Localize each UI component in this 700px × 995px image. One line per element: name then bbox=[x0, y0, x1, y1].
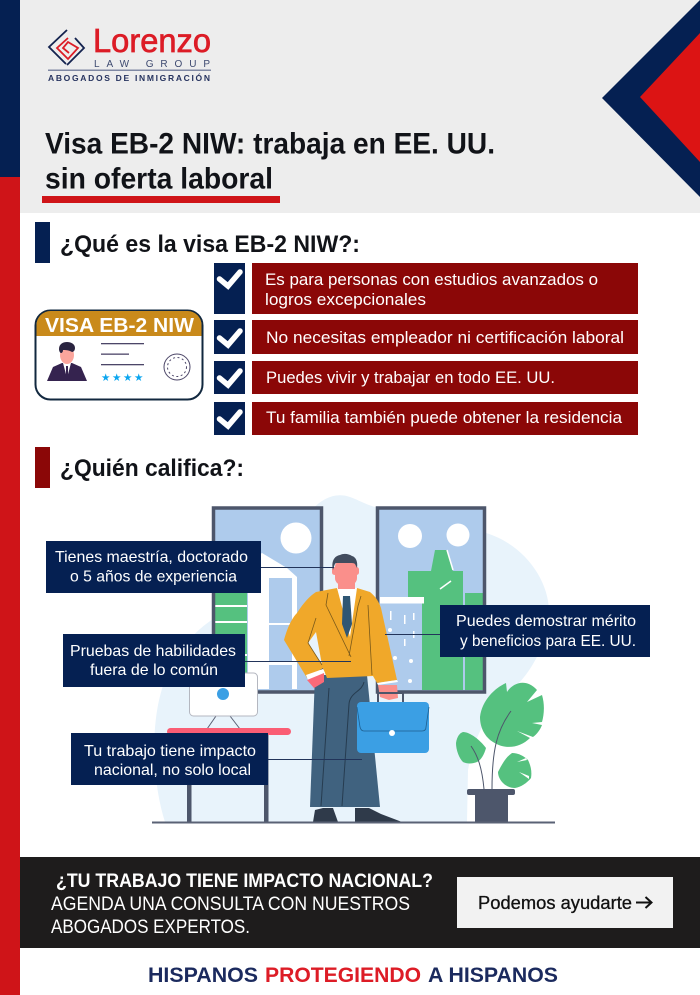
footer slogan bbox=[148, 963, 558, 987]
card stars bbox=[101, 372, 144, 384]
ground line bbox=[152, 822, 555, 824]
title: Visa EB-2 NIW: trabaja en EE. UU. bbox=[45, 128, 495, 160]
call to action band: ABOGADOS EXPERTOS. bbox=[51, 917, 250, 938]
connector lines bbox=[245, 568, 440, 760]
heading: quien califica: ¿Quién califica?: bbox=[60, 455, 244, 482]
card seal bbox=[164, 354, 190, 380]
card lines bbox=[101, 343, 144, 365]
item 1: Es para personas con estudios avanzados o bbox=[265, 271, 598, 289]
label: habilidades: fuera de lo común bbox=[90, 662, 218, 679]
footer slogan: A HISPANOS bbox=[428, 963, 558, 987]
item 1: logros excepcionales bbox=[265, 291, 426, 309]
heading: que es la visa bbox=[35, 222, 360, 263]
title: sin oferta laboral bbox=[45, 162, 273, 196]
logo: LAW GROUP bbox=[94, 59, 210, 70]
illustration: professional at office bbox=[46, 495, 650, 824]
label: habilidades: Pruebas de habilidades bbox=[70, 643, 236, 660]
item 2: No necesitas empleador ni certificación laboral bbox=[266, 329, 624, 347]
visa card icon bbox=[36, 310, 202, 400]
label: habilidades bbox=[63, 634, 245, 687]
logo: ABOGADOS DE INMIGRACIÓN bbox=[48, 72, 210, 83]
shirt and tie bbox=[337, 588, 357, 637]
cuffs and hands bbox=[306, 669, 325, 680]
briefcase bbox=[378, 693, 403, 702]
label: merito: y beneficios para EE. UU. bbox=[460, 633, 636, 650]
card stars: ★ bbox=[134, 372, 144, 384]
label: maestria bbox=[46, 541, 261, 593]
label: merito: Puedes demostrar mérito bbox=[456, 613, 636, 630]
call to action band: ¿TU TRABAJO TIENE IMPACTO NACIONAL? bbox=[56, 871, 433, 892]
call to action band bbox=[20, 857, 700, 948]
logo bbox=[48, 22, 211, 83]
call to action band: AGENDA UNA CONSULTA CON NUESTROS bbox=[51, 894, 410, 915]
desk and monitor bbox=[167, 673, 291, 822]
left window bbox=[214, 508, 322, 692]
heading: quien califica bbox=[35, 447, 244, 488]
corner diamond graphic bbox=[602, 0, 700, 197]
footer slogan: PROTEGIENDO bbox=[265, 963, 421, 987]
item 3 bbox=[214, 361, 638, 394]
label: merito bbox=[440, 605, 650, 657]
header panel bbox=[20, 0, 700, 213]
label: impacto: Tu trabajo tiene impacto bbox=[84, 743, 256, 760]
title bbox=[42, 128, 495, 203]
visa card icon: VISA EB-2 NIW bbox=[45, 315, 194, 337]
card portrait bbox=[47, 342, 87, 381]
heading: que es la visa: ¿Qué es la visa EB-2 NIW?: bbox=[60, 231, 360, 258]
card stars: ★ bbox=[123, 372, 133, 384]
card stars: ★ bbox=[112, 372, 122, 384]
item 3: Puedes vivir y trabajar en todo EE. UU. bbox=[266, 369, 555, 387]
item 1 bbox=[214, 263, 638, 314]
trousers bbox=[310, 675, 380, 807]
label: impacto: nacional, no solo local bbox=[94, 762, 251, 779]
plant bbox=[456, 683, 544, 822]
background blob bbox=[154, 495, 549, 822]
shoes bbox=[313, 808, 402, 822]
item 4 bbox=[214, 402, 638, 435]
label: maestria: o 5 años de experiencia bbox=[70, 568, 237, 586]
neck and head bbox=[338, 578, 355, 589]
logo: Lorenzo bbox=[93, 22, 211, 59]
button bbox=[457, 877, 673, 928]
left colour strip bbox=[0, 0, 20, 995]
label: impacto bbox=[71, 733, 268, 785]
checklist bbox=[214, 263, 638, 435]
jacket bbox=[284, 588, 397, 683]
item 4: Tu familia también puede obtener la residencia bbox=[266, 409, 623, 427]
arrow bbox=[636, 897, 652, 908]
person bbox=[284, 554, 429, 822]
card stars: ★ bbox=[101, 372, 111, 384]
label: maestria: Tienes maestría, doctorado bbox=[55, 549, 248, 566]
button: Podemos ayudarte bbox=[478, 893, 632, 913]
footer slogan: HISPANOS bbox=[148, 963, 258, 987]
right window bbox=[378, 508, 484, 692]
item 2 bbox=[214, 320, 638, 354]
